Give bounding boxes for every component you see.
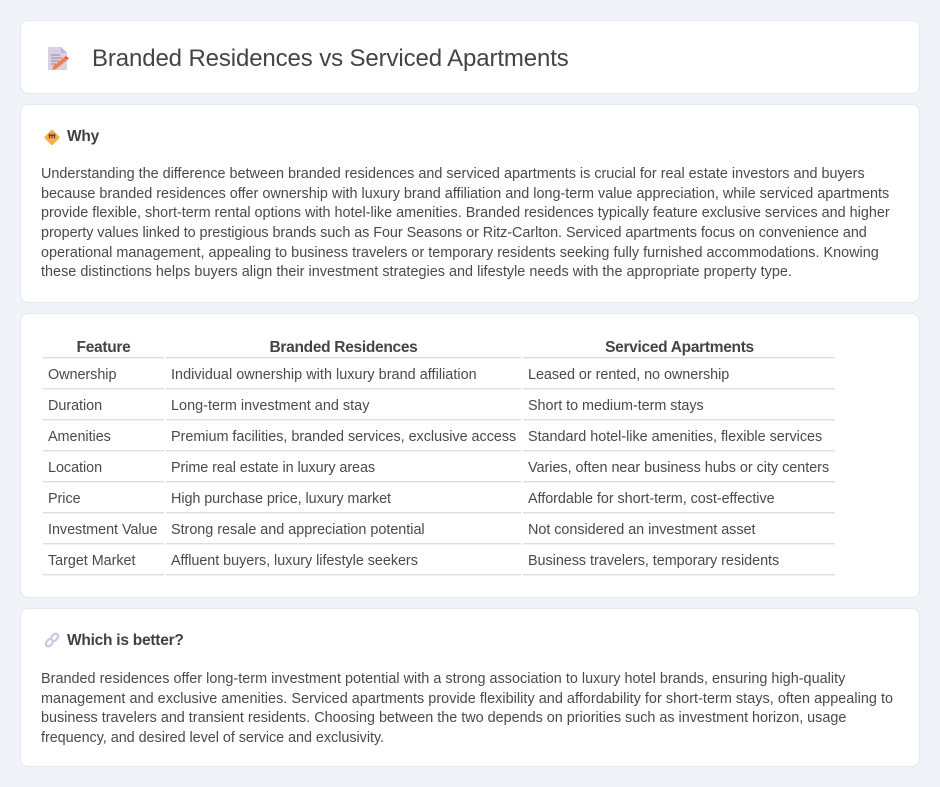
panel: which is better <box>20 608 920 767</box>
text block: verdict <box>41 671 893 746</box>
table row: location: Varies, often near business hubs or city centers <box>528 460 829 476</box>
text block: verdict: Branded residences offer long-term investment potential with a strong association to luxury hotel brands, ensuring high-quality <box>41 671 845 687</box>
table row: price <box>43 491 835 514</box>
table header: Branded Residences <box>270 339 417 356</box>
table row: duration <box>43 398 835 421</box>
icon: diamond warning sign <box>44 130 60 146</box>
text block: why explanation: provide flexible, short-term rental options with hotel-like amenities. Branded residences typically feature exclusive services and higher <box>41 205 890 221</box>
table row: target market: Target Market <box>48 553 135 569</box>
table row: amenities: Premium facilities, branded services, exclusive access <box>171 429 516 445</box>
heading: why: Why <box>67 128 99 145</box>
table row: amenities: Amenities <box>48 429 111 445</box>
table row: target market: Affluent buyers, luxury lifestyle seekers <box>171 553 418 569</box>
text block: why explanation: Understanding the difference between branded residences and serviced apartments is crucial for real estate investors and buyers <box>41 166 865 182</box>
text block: verdict: business travelers and transient residents. Choosing between the two depends on priorities such as investment horizon, usage <box>41 710 846 726</box>
panel: comparison table <box>20 313 920 598</box>
icon: document with pencil <box>48 47 69 70</box>
table row: ownership <box>43 367 835 390</box>
text block: verdict: frequency, and desired level of service and exclusivity. <box>41 730 384 746</box>
title: Branded Residences vs Serviced Apartments <box>92 45 569 72</box>
table row: location: Location <box>48 460 102 476</box>
text block: why explanation: property values linked to prestigious brands such as Four Seasons or Ritz-Carlton. Serviced apartments focus on convenience and <box>41 225 867 241</box>
table row: investment value: Not considered an investment asset <box>528 522 755 538</box>
table row: ownership: Individual ownership with luxury brand affiliation <box>171 367 477 383</box>
panel: why <box>20 104 920 303</box>
text block: why explanation: these distinctions helps buyers align their investment strategies and lifestyle needs with the appropriate property type. <box>41 264 792 280</box>
text block: why explanation <box>41 166 890 280</box>
table row: price: High purchase price, luxury market <box>171 491 391 507</box>
table row: amenities <box>43 429 835 452</box>
table row: duration: Long-term investment and stay <box>171 398 369 414</box>
table row: ownership: Leased or rented, no ownership <box>528 367 729 383</box>
table row: target market <box>43 553 835 576</box>
table row: investment value: Investment Value <box>48 522 157 538</box>
text block: verdict: management and exclusive amenities. Serviced apartments provide flexibility and affordability for short-term stays, often appealing to <box>41 691 893 707</box>
table row: price: Affordable for short-term, cost-effective <box>528 491 775 507</box>
table row: location: Prime real estate in luxury areas <box>171 460 375 476</box>
table header: Serviced Apartments <box>605 339 754 356</box>
table row: investment value: Strong resale and appreciation potential <box>171 522 425 538</box>
table header: Feature <box>77 339 130 356</box>
panel: header <box>20 20 920 94</box>
table row: duration: Duration <box>48 398 102 414</box>
table row: duration: Short to medium-term stays <box>528 398 704 414</box>
table row: target market: Business travelers, temporary residents <box>528 553 779 569</box>
table row: investment value <box>43 522 835 545</box>
heading: which is better: Which is better? <box>67 632 184 649</box>
table row: location <box>43 460 835 483</box>
text block: why explanation: operational management, appealing to business travelers or temporary residents seeking fully furnished accommodations. Knowing <box>41 245 879 261</box>
table row: amenities: Standard hotel-like amenities, flexible services <box>528 429 822 445</box>
icon: chain link <box>44 632 60 648</box>
table header <box>43 339 835 359</box>
table row: price: Price <box>48 491 81 507</box>
table row: ownership: Ownership <box>48 367 116 383</box>
text block: why explanation: because branded residences offer ownership with luxury brand affiliation and long-term value appreciation, while serviced apartments <box>41 186 889 202</box>
